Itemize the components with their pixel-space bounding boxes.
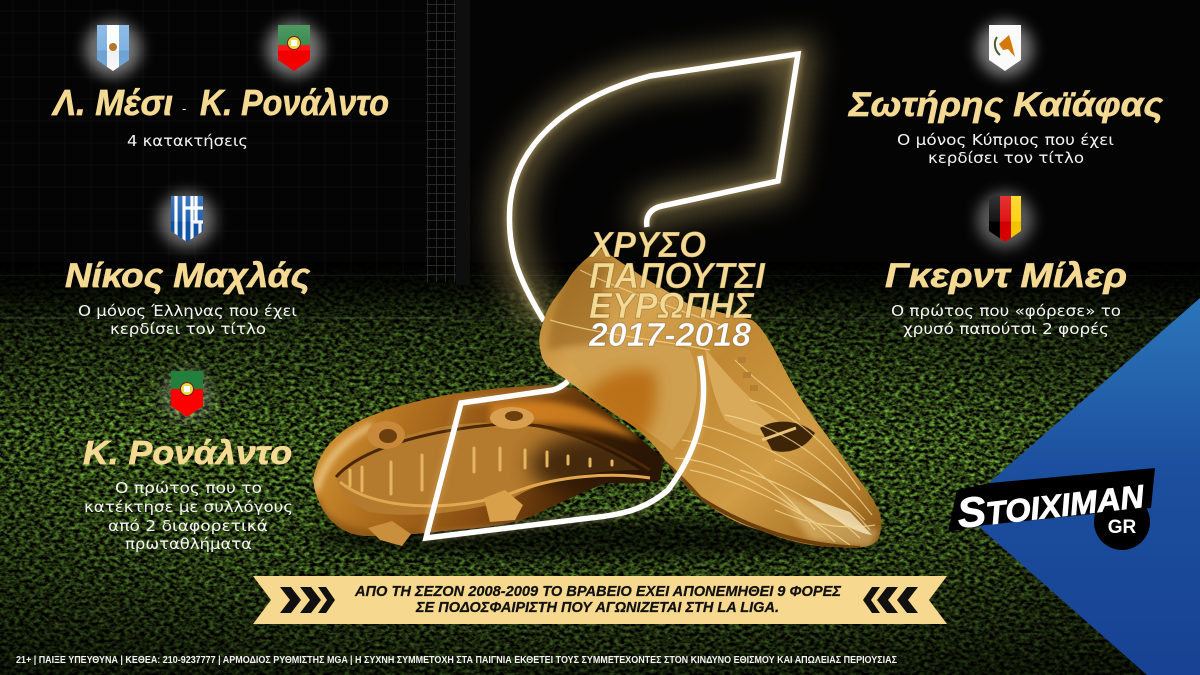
center title: golden boot 2017-2018: ΠΑΠΟΥΤΣΙ (589, 255, 766, 296)
text: first with clubs from two leagues: από 2 διαφορετικά (108, 517, 268, 535)
flag: Cyprus (977, 21, 1033, 77)
boots: golden football boots (313, 248, 885, 558)
icon: right chevrons (863, 587, 918, 613)
flag: Germany (977, 192, 1033, 248)
icon: left chevrons (280, 587, 335, 613)
text: banner lines: ΑΠΟ ΤΗ ΣΕΖΟΝ 2008-2009 ΤΟ ΒΡΑΒΕΙΟ ΕΧΕΙ ΑΠΟΝΕΜΗΘΕΙ 9 ΦΟΡΕΣ (354, 584, 841, 600)
text: only Cypriot: Ο μόνος Κύπριος που έχει (897, 131, 1114, 149)
text: banner lines: ΣΕ ΠΟΔΟΣΦΑΙΡΙΣΤΗ ΠΟΥ ΑΓΩΝΙΖΕΤΑΙ ΣΤΗ LA LIGA. (415, 600, 779, 616)
center title: golden boot 2017-2018: ΧΡΥΣΟ (588, 224, 706, 265)
center title: golden boot 2017-2018: 2017-2018 (588, 316, 752, 353)
text: first with clubs from two leagues: πρωταθλήματα (125, 535, 252, 553)
heading: Messi - Ronaldo: Κ. Ρονάλντο (200, 82, 389, 123)
footer: responsible gaming disclaimer: 21+ | ΠΑΙΞΕ ΥΠΕΥΘΥΝΑ | ΚΕΘΕΑ: 210-9237777 | ΑΡΜΟΔΙΟΣ ΡΥΘΜΙΣΤΗΣ MGA | Η ΣΥΧΝΗ ΣΥΜΜΕΤΟΧΗ ΣΤΑ ΠΑΙΓΝΙΑ ΕΚΘΕΤΕΙ ΤΟΥΣ ΣΥΜΜΕΤΕΧΟΝΤΕΣ ΣΤΟΝ ΚΙΝΔΥΝΟ ΕΘΙΣΜΟΥ ΚΑΙ ΑΠΩΛΕΙΑΣ ΠΕΡΙΟΥΣΙΑΣ (16, 655, 897, 666)
neon S shape: lower part (426, 356, 704, 538)
logo: Stoiximan GR: STOIXIMAN (955, 469, 1147, 537)
center title: golden boot 2017-2018: ΕΥΡΩΠΗΣ (589, 285, 755, 326)
text: first to win twice: Ο πρώτος που «φόρεσε» το (891, 302, 1121, 320)
boot: lower, sole facing up (313, 385, 670, 546)
corner: blue triangle (959, 298, 1200, 675)
banner: La Liga fact (253, 576, 947, 624)
text: first with clubs from two leagues (84, 479, 293, 553)
text: first to win twice (891, 302, 1121, 338)
heading: Messi - Ronaldo: - (182, 101, 186, 116)
text: only Greek (78, 302, 297, 338)
text: four wins: 4 κατακτήσεις (127, 132, 248, 150)
text: only Greek: κερδίσει τον τίτλο (110, 320, 266, 338)
background: grass pitch (0, 262, 1200, 675)
flag: Argentina (85, 21, 141, 77)
flag: Portugal second (161, 369, 213, 421)
background: goal net (0, 0, 470, 285)
heading: Nikos Machlas: Νίκος Μαχλάς (65, 257, 311, 295)
text: only Cypriot: κερδίσει τον τίτλο (928, 149, 1084, 167)
logo: Stoiximan GR: GR (1108, 517, 1137, 538)
heading: Messi - Ronaldo: Λ. Μέσι (51, 82, 173, 123)
heading: Gerd Muller: Γκερντ Μίλερ (885, 257, 1127, 295)
text: first with clubs from two leagues: κατέκτησε με συλλόγους (84, 498, 293, 516)
boot: upper, standing on heel (539, 248, 881, 548)
text: only Greek: Ο μόνος Έλληνας που έχει (78, 302, 297, 320)
neon S shape: upper part (509, 54, 798, 321)
logo: Stoiximan GR (948, 468, 1155, 550)
heading: Sotiris Kaiafas: Σωτήρης Καϊάφας (848, 86, 1164, 124)
heading: Messi - Ronaldo (51, 82, 389, 123)
text: first with clubs from two leagues: Ο πρώτος που το (115, 479, 262, 497)
flag: Greece (159, 192, 215, 248)
text: only Cypriot (897, 131, 1114, 167)
heading: C. Ronaldo: Κ. Ρονάλντο (83, 434, 292, 471)
text: banner lines (354, 584, 841, 616)
background: night sky (0, 0, 1200, 280)
text: first to win twice: χρυσό παπούτσι 2 φορές (903, 320, 1109, 338)
flag: Portugal (266, 21, 322, 77)
center title: golden boot 2017-2018 (588, 224, 766, 353)
